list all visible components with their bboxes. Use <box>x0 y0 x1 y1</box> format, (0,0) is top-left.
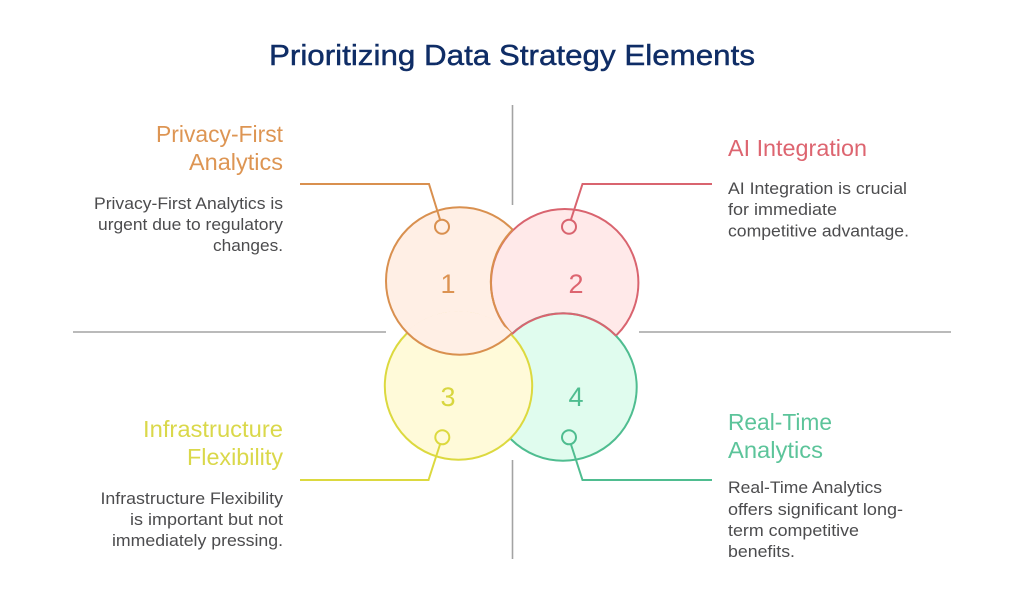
description: benefits. <box>728 542 795 561</box>
heading: Analytics <box>728 437 823 463</box>
description: Infrastructure Flexibility <box>100 489 284 508</box>
title: Prioritizing Data Strategy Elements <box>269 40 755 72</box>
circle 2 and 4 shared edge <box>512 313 616 336</box>
block: Infrastructure Flexibility <box>100 416 284 550</box>
quadrant axis lines <box>73 105 951 559</box>
connector 3 <box>300 430 449 480</box>
number 4: 4 <box>568 382 584 412</box>
description: AI Integration is crucial <box>728 179 907 198</box>
heading: AI Integration <box>728 135 867 161</box>
connector 2 <box>562 184 712 234</box>
overlapping circles diagram <box>385 207 638 461</box>
heading: Infrastructure <box>143 416 283 442</box>
connector 1 <box>300 184 449 234</box>
heading: Flexibility <box>187 444 283 470</box>
heading: Analytics <box>189 149 283 175</box>
description: offers significant long- <box>728 500 903 519</box>
circle 1 and 2 shared edge <box>491 230 513 334</box>
number 1: 1 <box>440 269 456 299</box>
block: AI Integration <box>728 135 909 240</box>
circle 1 overlap on circle 3 <box>406 311 512 356</box>
description: term competitive <box>728 521 859 540</box>
circle 1 <box>386 207 533 355</box>
circle 3 <box>385 312 532 460</box>
description: for immediate <box>728 200 837 219</box>
number 3: 3 <box>440 382 456 412</box>
number 2: 2 <box>568 269 584 299</box>
description: changes. <box>213 236 283 255</box>
block: Real-Time Analytics <box>728 409 903 561</box>
description: immediately pressing. <box>112 531 283 550</box>
description: Real-Time Analytics <box>728 478 882 497</box>
infographic canvas <box>73 44 951 559</box>
description: competitive advantage. <box>728 222 909 240</box>
circle 2 <box>491 209 638 356</box>
description: urgent due to regulatory <box>98 215 284 234</box>
circle 4 <box>489 313 637 461</box>
heading: Privacy-First <box>156 121 283 147</box>
block: Privacy-First Analytics <box>94 121 284 255</box>
description: is important but not <box>130 510 283 529</box>
description: Privacy-First Analytics is <box>94 194 283 213</box>
connector 4 <box>562 430 712 480</box>
heading: Real-Time <box>728 409 832 435</box>
